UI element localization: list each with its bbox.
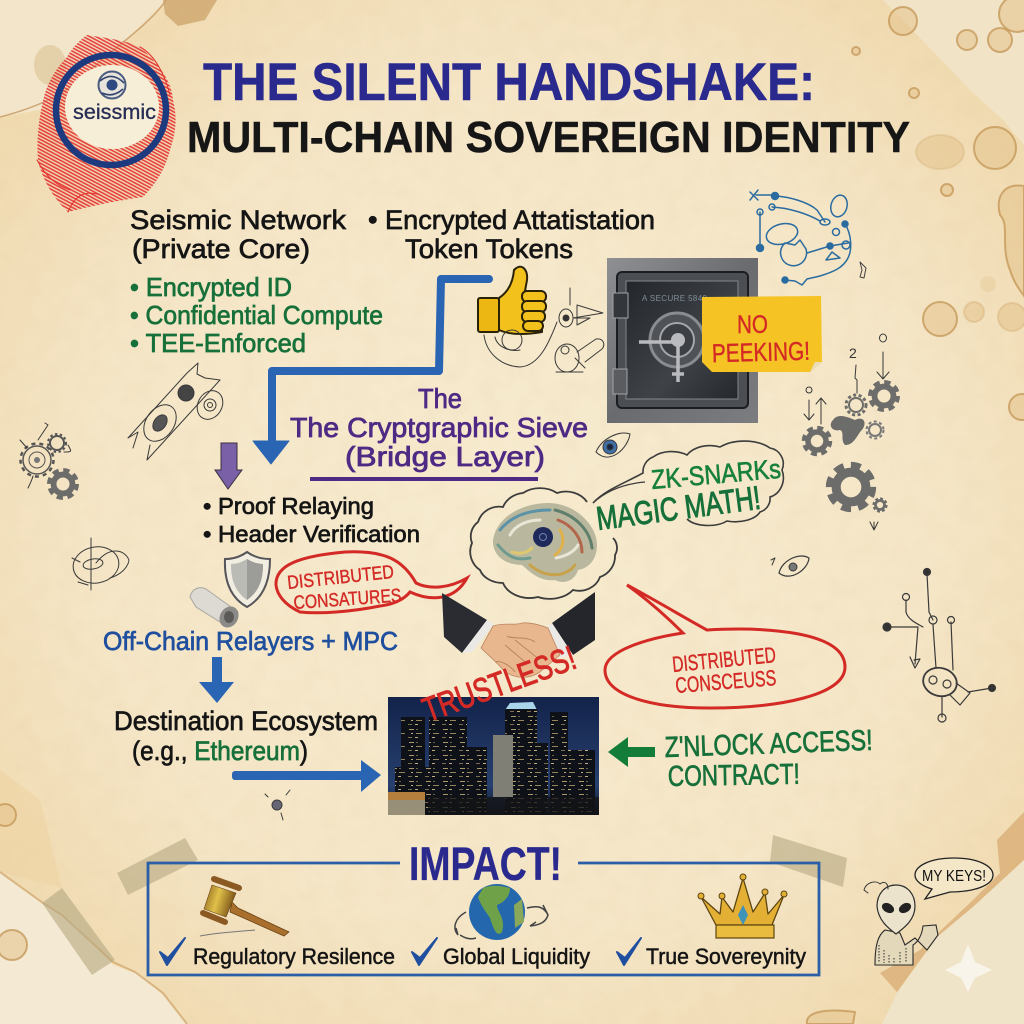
- check: global liquidity: [412, 938, 590, 969]
- speech bubble: distributed consensus: [605, 585, 845, 708]
- logo mark: [98, 72, 126, 98]
- text: encrypted attestation tokens: • Encrypted Attatistation: [368, 205, 655, 235]
- list: bridge functions: • Proof Relaying: [203, 493, 374, 519]
- speech bubble: zk-snarks magic math: [593, 441, 783, 537]
- heading: cryptographic sieve: [290, 383, 588, 481]
- heading: Seismic Network private core: [130, 205, 347, 264]
- doodle: right figure: [883, 568, 996, 722]
- text: unlock access contract: [664, 725, 873, 793]
- text: unlock access contract: Z'NLOCK ACCESS!: [664, 725, 873, 764]
- speech bubble: distributed consatures: [276, 552, 467, 614]
- label: zk-snarks: ZK-SNARKs: [650, 454, 782, 495]
- speech bubble: distributed consatures: CONSATURES: [293, 586, 402, 614]
- list: private core features: • Confidential Compute: [130, 300, 383, 330]
- heading: cryptographic sieve: The: [418, 383, 462, 414]
- speech bubble: my keys: MY KEYS!: [922, 868, 986, 885]
- speech bubble: distributed consatures: DISTRIBUTED: [286, 562, 395, 594]
- arrow: relayers down: [199, 657, 234, 703]
- speech bubble: distributed consensus: DISTRIBUTED: [671, 642, 777, 677]
- list: bridge functions: [203, 493, 420, 547]
- check: true sovereignty: [617, 938, 806, 969]
- icon: crown: [698, 874, 787, 938]
- label: off-chain relayers: Off-Chain Relayers + MPC: [103, 626, 398, 656]
- stamp: trustless: TRUSTLESS!: [418, 639, 581, 730]
- cloud: brain thought: [470, 488, 617, 599]
- list: private core features: • Encrypted ID: [130, 272, 292, 302]
- doodle: left gears: [20, 423, 76, 497]
- icon: shield: [225, 552, 270, 607]
- heading: cryptographic sieve: The Cryptgraphic Sieve: [290, 412, 588, 443]
- logo wordmark: seissmic: [73, 101, 156, 124]
- image: vault: A SECURE 5849: [642, 294, 708, 303]
- doodle: eye right: [771, 556, 809, 576]
- check: regulatory resilience: Regulatory Resilence: [193, 944, 395, 969]
- text: encrypted attestation tokens: Token Tokens: [405, 234, 573, 264]
- brain: [493, 503, 597, 582]
- text: unlock access contract: CONTRACT!: [668, 759, 800, 793]
- label: magic math: MAGIC MATH!: [594, 479, 763, 537]
- panel: impact box: [148, 837, 819, 975]
- doodle: eye scroll sketch: [128, 363, 228, 460]
- check: global liquidity: Global Liquidity: [443, 944, 590, 969]
- icon: globe: [455, 884, 548, 940]
- doodle: gears and eye near thumb: [484, 288, 604, 372]
- check: regulatory resilience: [160, 938, 395, 969]
- icon: thumbs up: [478, 267, 546, 334]
- heading: impact: IMPACT!: [409, 837, 562, 890]
- heading: destination ecosystem: [114, 706, 378, 766]
- image: handshake: [442, 592, 595, 677]
- sticky note: no peeking: [702, 296, 822, 372]
- tape strips: [42, 835, 847, 975]
- image: city skyline: [388, 697, 599, 815]
- icon: eye: [596, 433, 630, 457]
- sticky note: no peeking: NO: [737, 311, 768, 339]
- image: vault: [607, 258, 758, 423]
- list: bridge functions: • Header Verification: [203, 521, 420, 547]
- doodle: tiny eye: [265, 790, 290, 820]
- doodle: right gears: [804, 334, 897, 530]
- arrow: contract to city: [608, 737, 655, 767]
- list: private core features: • TEE-Enforced: [130, 328, 306, 358]
- heading: Seismic Network private core: Seismic Network: [130, 205, 347, 235]
- title: THE SILENT HANDSHAKE:: [203, 53, 815, 112]
- icon: small purple down arrow: [215, 443, 242, 489]
- list: private core features: [130, 272, 383, 358]
- title: [187, 53, 910, 162]
- speech bubble: distributed consensus: CONSCEUSS: [674, 665, 777, 698]
- icon: sparkle: [945, 944, 992, 992]
- doodle: alien with keys: [864, 858, 993, 965]
- sticky note: no peeking: PEEKING!: [712, 336, 810, 368]
- doodle: blue circuit sketch: [750, 190, 866, 285]
- icon: relayer scroll: [190, 588, 242, 631]
- heading: Seismic Network private core: (Private Core): [132, 234, 310, 264]
- arrow: destination to city: [232, 760, 381, 792]
- doodle: right gears: 2: [849, 345, 857, 361]
- arrow: tokens to bridge: [253, 279, 489, 464]
- text: encrypted attestation tokens: [368, 205, 655, 264]
- title: MULTI-CHAIN SOVEREIGN IDENTITY: [187, 113, 910, 162]
- heading: cryptographic sieve: (Bridge Layer): [345, 441, 545, 472]
- logo: seismic badge: [37, 35, 176, 212]
- heading: destination ecosystem: (e.g., Ethereum): [132, 736, 308, 766]
- heading: destination ecosystem: Destination Ecosystem: [114, 706, 378, 736]
- check: true sovereignty: True Sovereynity: [646, 944, 806, 969]
- doodle: left scribble: [70, 538, 129, 590]
- icon: gavel: [200, 879, 289, 936]
